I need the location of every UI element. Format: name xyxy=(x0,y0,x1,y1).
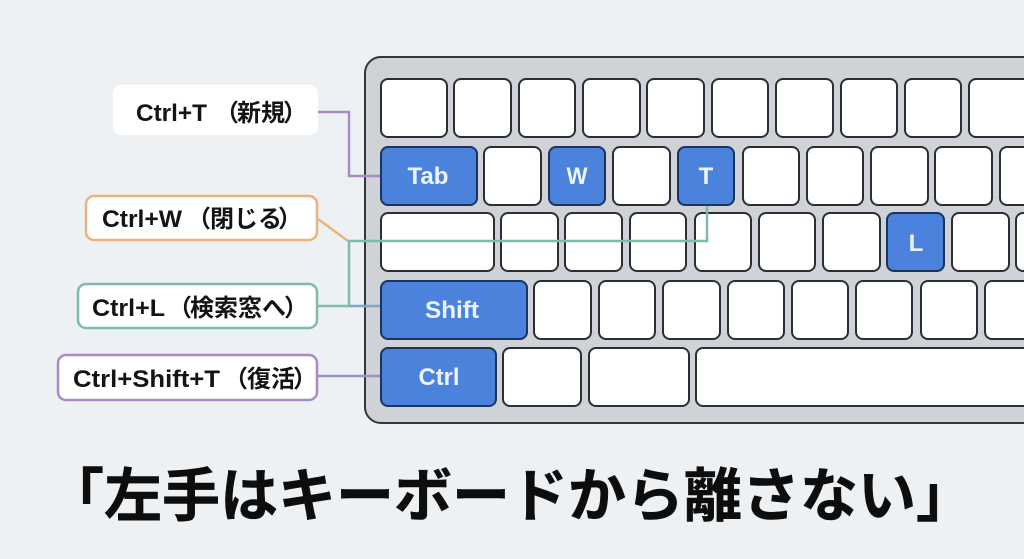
label: Ctrl+L search box: 検索窓へ xyxy=(190,295,286,322)
keyboard xyxy=(365,57,1024,423)
label: Ctrl+W close: 閉じる xyxy=(210,206,282,233)
key: Shift xyxy=(381,281,527,339)
key: T: T xyxy=(699,163,714,190)
key: L xyxy=(887,213,944,271)
title: 「左手はキーボードから離さない」 xyxy=(46,464,974,529)
key: L: L xyxy=(909,230,923,257)
connector: Ctrl+T to Tab xyxy=(318,112,382,176)
connector: Ctrl+L to Shift xyxy=(349,305,382,307)
label: Ctrl+W close: （ xyxy=(187,206,211,233)
label: Ctrl+T new: ） xyxy=(283,100,307,127)
label: Ctrl+T new xyxy=(113,85,318,135)
key: W xyxy=(549,147,605,205)
label: Ctrl+Shift+T restore: Ctrl+Shift+T xyxy=(73,366,220,393)
key: Tab: Tab xyxy=(408,163,448,190)
key: Ctrl xyxy=(381,348,496,406)
key row 5 xyxy=(503,348,1024,406)
label: Ctrl+T new: 新規 xyxy=(237,100,285,127)
key: W: W xyxy=(566,163,588,190)
label: Ctrl+W close: Ctrl+W xyxy=(102,206,182,233)
key row 4 xyxy=(534,281,1024,339)
key: T xyxy=(678,147,734,205)
key: Ctrl: Ctrl xyxy=(418,364,460,391)
key row 3 xyxy=(381,213,1024,271)
label: Ctrl+L search box: ） xyxy=(284,295,308,322)
label: Ctrl+Shift+T restore: （ xyxy=(224,366,248,393)
label: Ctrl+Shift+T restore: ） xyxy=(293,366,317,393)
key row 2 xyxy=(484,147,1024,205)
key: Shift: Shift xyxy=(425,297,479,324)
connector: teal routes to T key and Shift xyxy=(318,205,707,306)
keyboard case xyxy=(365,57,1024,423)
label: Ctrl+W close: ） xyxy=(278,206,302,233)
label: Ctrl+Shift+T restore: 復活 xyxy=(247,366,295,393)
label: Ctrl+L search box: Ctrl+L xyxy=(92,295,165,322)
connector: Ctrl+W xyxy=(318,219,348,241)
label: Ctrl+T new: （ xyxy=(215,100,239,127)
label: Ctrl+T new: Ctrl+T xyxy=(136,100,207,127)
label: Ctrl+L search box xyxy=(78,284,317,328)
key: Tab xyxy=(381,147,477,205)
label: Ctrl+W close xyxy=(86,196,317,240)
label: Ctrl+Shift+T restore xyxy=(58,355,317,400)
connector: Ctrl+Shift+T to Ctrl xyxy=(318,375,382,377)
label: Ctrl+L search box: （ xyxy=(168,295,192,322)
key row 1 xyxy=(381,79,1024,137)
